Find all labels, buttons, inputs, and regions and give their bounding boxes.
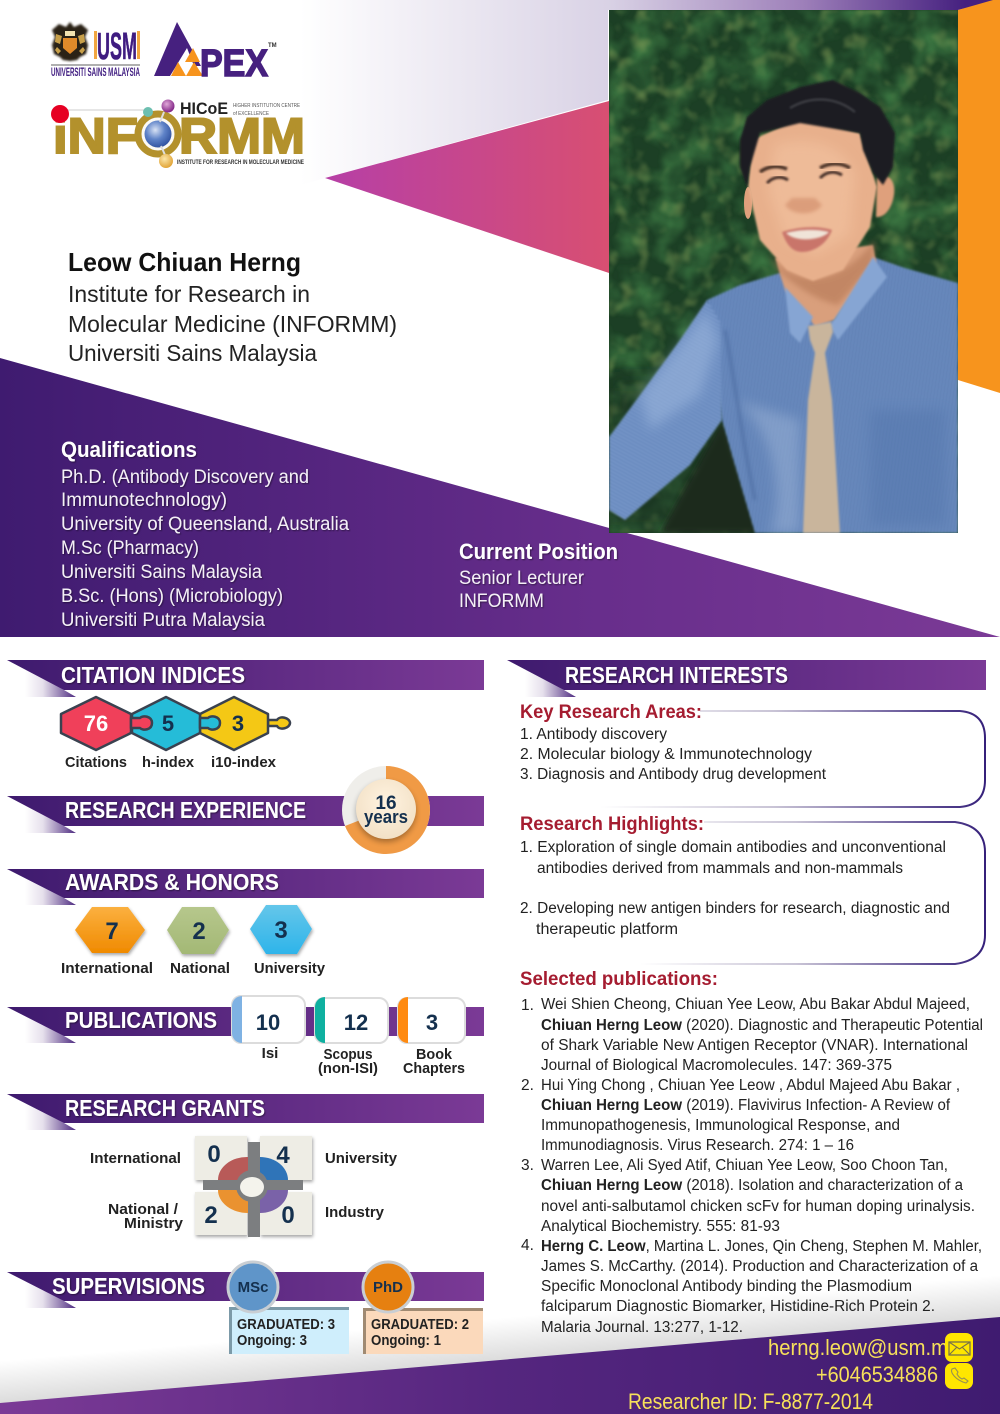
current position <box>459 539 618 612</box>
logo: INFORMM HICoE: iNFORMM <box>53 108 305 164</box>
current position: Senior Lecturer <box>459 568 585 589</box>
banner: publications <box>7 1007 484 1043</box>
citation labels: h-index <box>142 754 195 771</box>
pink triangle <box>325 101 609 273</box>
research highlights: 2. Developing new antigen binders for research, diagnostic and <box>520 900 950 917</box>
brows and eyes <box>760 167 787 172</box>
selected publications: Malaria Journal. 13:277, 1-12. <box>541 1319 743 1336</box>
banner: awards and honors: AWARDS & HONORS <box>65 869 279 895</box>
banner: research experience <box>7 796 484 833</box>
banner: publications: PUBLICATIONS <box>65 1007 217 1033</box>
research highlights: therapeutic platform <box>536 921 678 938</box>
citation values: 3 <box>232 711 244 736</box>
selected publications: Chiuan Herng Leow (2018). Isolation and characterization of a <box>541 1177 963 1194</box>
citation labels: i10-index <box>211 754 277 771</box>
selected publications: Herng C. Leow, Martina L. Jones, Qin Cheng, Stephen M. Mahler, <box>541 1238 982 1255</box>
selected publications: novel anti-salbutamol chicken scFv for human doping urinalysis. <box>541 1198 975 1215</box>
grants quadrant diagram <box>195 1136 312 1237</box>
banner: supervisions <box>7 1272 484 1308</box>
name and institute: Institute for Research in <box>68 281 310 307</box>
collar <box>785 287 813 343</box>
experience ring <box>342 766 430 854</box>
key research areas frame <box>600 711 985 807</box>
qualifications: B.Sc. (Hons) (Microbiology) <box>61 586 283 607</box>
supervision: MSc: Ongoing: 3 <box>237 1333 307 1349</box>
grants quadrant diagram: 0 <box>207 1141 221 1168</box>
tie <box>803 322 840 533</box>
selected publications: Chiuan Herng Leow (2019). Flavivirus Infection- A Review of <box>541 1097 951 1114</box>
grants quadrant diagram: 0 <box>281 1202 295 1229</box>
selected publications: 3. <box>521 1157 534 1174</box>
banner: research experience: RESEARCH EXPERIENCE <box>65 797 306 823</box>
research highlights: 1. Exploration of single domain antibodies and unconventional <box>520 839 946 856</box>
grants quadrant diagram: 4 <box>276 1142 290 1169</box>
experience ring: 16 <box>375 793 397 814</box>
purple diagonal band <box>0 358 1000 637</box>
research highlights: antibodies derived from mammals and non-mammals <box>537 860 903 877</box>
supervision: PhD: Ongoing: 1 <box>371 1333 441 1349</box>
key research areas: 1. Antibody discovery <box>520 726 667 743</box>
publication cards: 3 <box>426 1010 438 1035</box>
icon: phone <box>945 1363 973 1389</box>
award labels: International <box>61 960 153 977</box>
hair <box>740 80 895 187</box>
publication cards: 10 <box>256 1010 280 1035</box>
name and institute: Universiti Sains Malaysia <box>68 340 317 366</box>
top gradient background <box>250 0 1000 200</box>
selected publications: 1. <box>521 997 534 1014</box>
publication cards: 12 <box>344 1010 368 1035</box>
smile <box>782 227 832 252</box>
ears <box>876 176 894 217</box>
icon: email <box>945 1333 973 1362</box>
footer shadow <box>0 1275 1000 1404</box>
citation labels: Citations <box>65 754 127 771</box>
citation values <box>84 711 244 736</box>
publication labels: Chapters <box>403 1060 465 1077</box>
publication labels: (non-ISI) <box>318 1060 378 1077</box>
selected publications: Chiuan Herng Leow (2020). Diagnostic and Therapeutic Potential <box>541 1017 983 1034</box>
qualifications: Immunotechnology) <box>61 490 227 511</box>
contact details: Researcher ID: F-8877-2014 <box>628 1389 873 1414</box>
supervision: PhD: PhD <box>373 1279 403 1296</box>
experience ring: years <box>364 807 408 827</box>
banner: research grants: RESEARCH GRANTS <box>65 1095 265 1121</box>
selected publications <box>520 968 983 1336</box>
citation hexagon chain <box>61 697 290 750</box>
publication labels <box>262 1045 465 1077</box>
award values <box>105 917 288 945</box>
selected publications: Warren Lee, Ali Syed Atif, Chiuan Yee Leow, Soo Choon Tan, <box>541 1157 948 1174</box>
supervision: MSc: GRADUATED: 3 <box>237 1317 335 1333</box>
logo: INFORMM HICoE: HIGHER INSTITUTION CENTRE <box>233 103 300 109</box>
research highlights frame <box>640 822 985 964</box>
banner: citation indices: CITATION INDICES <box>61 662 245 688</box>
publication cards <box>232 996 465 1043</box>
selected publications: Selected publications: <box>520 968 718 990</box>
key research areas: 3. Diagnosis and Antibody drug development <box>520 766 827 783</box>
citation values: 76 <box>84 711 108 736</box>
banner: research interests: RESEARCH INTERESTS <box>565 662 788 688</box>
nose <box>785 198 822 213</box>
logo: APEX <box>154 22 277 85</box>
logo: INFORMM HICoE: of EXCELLENCE <box>233 111 269 117</box>
supervision: MSc <box>228 1262 349 1354</box>
selected publications: Analytical Biochemistry. 555: 81-93 <box>541 1218 780 1235</box>
portrait photo <box>609 10 958 533</box>
logo: INFORMM HICoE: INSTITUTE FOR RESEARCH IN MOLECULAR MEDICINE <box>177 160 304 166</box>
award labels <box>61 960 326 977</box>
supervision: MSc: MSc <box>238 1279 268 1296</box>
award values: 7 <box>105 918 119 945</box>
award labels: National <box>170 960 230 977</box>
grant labels: Industry <box>325 1204 385 1221</box>
logo: USM: UNIVERSITI SAINS MALAYSIA <box>51 67 140 79</box>
banner: citation indices <box>7 660 484 697</box>
award values: 3 <box>274 917 288 944</box>
selected publications: James S. McCarthy. (2014). Production and Characterization of a <box>541 1258 978 1275</box>
supervision: PhD <box>363 1262 483 1354</box>
banner: supervisions: SUPERVISIONS <box>52 1273 205 1299</box>
grant labels: University <box>325 1150 398 1167</box>
contact details <box>628 1335 958 1414</box>
qualifications: Ph.D. (Antibody Discovery and <box>61 467 309 488</box>
grant labels <box>90 1150 398 1232</box>
logo: USM: USM <box>97 26 137 68</box>
logo: INFORMM HICoE: HICoE <box>180 99 228 118</box>
selected publications: of Shark Variable New Antigen Receptor (VNAR). International <box>541 1037 968 1054</box>
qualifications: Universiti Putra Malaysia <box>61 610 265 631</box>
grants quadrant diagram: 2 <box>204 1202 218 1229</box>
face <box>748 118 877 281</box>
selected publications: Wei Shien Cheong, Chiuan Yee Leow, Abu Bakar Abdul Majeed, <box>541 996 970 1013</box>
logo: APEX: TM <box>268 43 277 49</box>
footer band <box>0 1317 1000 1414</box>
logo: USM <box>51 22 140 79</box>
qualifications: University of Queensland, Australia <box>61 514 349 535</box>
citation values: 5 <box>162 711 174 736</box>
award values: 2 <box>192 918 206 945</box>
qualifications: Qualifications <box>61 437 197 462</box>
publication labels: Scopus <box>324 1046 372 1063</box>
selected publications: Journal of Biological Macromolecules. 147: 369-375 <box>541 1057 892 1074</box>
banner: awards and honors <box>7 869 484 905</box>
research highlights: Research Highlights: <box>520 813 704 835</box>
contact details: herng.leow@usm.my <box>768 1335 958 1360</box>
current position: INFORMM <box>459 591 544 612</box>
selected publications: 4. <box>521 1237 534 1254</box>
qualifications: M.Sc (Pharmacy) <box>61 538 199 559</box>
selected publications: Specific Monoclonal Antibody binding the Plasmodium <box>541 1278 912 1295</box>
banner: research interests <box>507 660 986 697</box>
grant labels: National / <box>108 1201 179 1218</box>
selected publications: falciparum Diagnostic Biomarker, Histidine-Rich Protein 2. <box>541 1298 935 1315</box>
name and institute: Leow Chiuan Herng <box>68 247 301 277</box>
logo: APEX: PEX <box>200 43 269 85</box>
qualifications <box>61 437 349 631</box>
neck <box>775 245 876 326</box>
name and institute <box>68 247 397 366</box>
award labels: University <box>254 960 326 977</box>
grant labels: International <box>90 1150 181 1167</box>
selected publications: Immunopathogenesis, Immunological Response, and <box>541 1117 900 1134</box>
publication labels: Isi <box>262 1045 278 1062</box>
grant labels: Ministry <box>124 1215 184 1232</box>
banner: research grants <box>7 1094 484 1130</box>
qualifications: Universiti Sains Malaysia <box>61 562 262 583</box>
selected publications: Immunodiagnosis. Virus Research. 274: 1 – 16 <box>541 1137 854 1154</box>
research highlights <box>520 813 950 938</box>
publication labels: Book <box>416 1046 453 1063</box>
key research areas: 2. Molecular biology & Immunotechnology <box>520 746 812 763</box>
name and institute: Molecular Medicine (INFORMM) <box>68 311 397 337</box>
shirt torso <box>707 257 958 533</box>
orange side panel <box>958 0 1000 393</box>
award hexagons <box>75 905 312 954</box>
supervision: PhD: GRADUATED: 2 <box>371 1317 469 1333</box>
contact details: +6046534886 <box>816 1362 938 1387</box>
shirt sleeve <box>609 300 722 520</box>
key research areas <box>520 701 827 783</box>
current position: Current Position <box>459 539 618 564</box>
citation labels <box>65 754 277 771</box>
selected publications: 2. <box>521 1077 534 1094</box>
key research areas: Key Research Areas: <box>520 701 702 723</box>
selected publications: Hui Ying Chong , Chiuan Yee Leow , Abdul Majeed Abu Bakar , <box>541 1077 960 1094</box>
